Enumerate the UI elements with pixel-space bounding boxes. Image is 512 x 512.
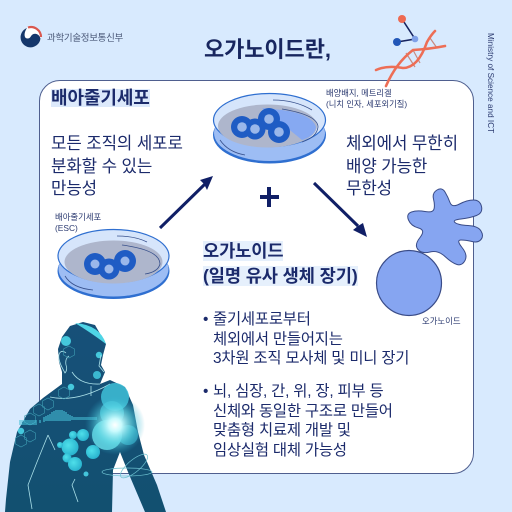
heading: organoid	[203, 241, 358, 286]
heading: embryonic stem cell: 배아줄기세포	[51, 88, 150, 108]
text block: description one: •	[203, 311, 208, 328]
icon: round organoid	[376, 250, 442, 316]
text block: self renewal	[346, 134, 458, 198]
icon: left petri dish	[58, 230, 170, 299]
text block: description one: 3차원 조직 모사체 및 미니 장기	[213, 350, 409, 367]
icon: branched organoid	[408, 189, 482, 265]
icon: plus sign	[260, 187, 279, 207]
label: culture medium	[326, 88, 407, 109]
text block: description two: 맞춤형 치료제 개발 및	[213, 422, 351, 439]
label: culture medium: (니치 인자, 세포외기질)	[326, 99, 407, 109]
white rounded content panel	[39, 80, 474, 474]
text block: description two: 임상실험 대체 가능성	[213, 442, 347, 458]
label: culture medium: 배양배지, 메트리겔	[326, 88, 392, 98]
label: ESC	[55, 212, 101, 232]
title: 오가노이드란,	[204, 37, 331, 62]
label: ESC: 배아줄기세포	[55, 212, 101, 222]
text block: self renewal: 체외에서 무한히	[346, 134, 458, 153]
icon: DNA and molecule	[376, 15, 445, 86]
text block: pluripotency: 분화할 수 있는	[51, 156, 152, 176]
heading: organoid: 오가노이드	[203, 241, 283, 261]
icon: top petri dish	[213, 94, 326, 164]
text block: description two: 뇌, 심장, 간, 위, 장, 피부 등	[213, 383, 383, 400]
logo text: 과학기술정보통신부	[47, 33, 123, 44]
text block: description two: •	[203, 383, 208, 400]
text block: description two	[203, 383, 393, 458]
text block: description one: 줄기세포로부터	[213, 311, 311, 328]
text block: pluripotency	[51, 134, 183, 198]
text block: description two: 신체와 동일한 구조로 만들어	[213, 402, 393, 420]
label: ESC: (ESC)	[55, 222, 78, 232]
text block: description one	[203, 311, 409, 367]
heading: organoid: (일명 유사 생체 장기)	[203, 266, 358, 286]
text block: pluripotency: 만능성	[51, 179, 97, 198]
ministry vertical text: Ministry of Science and ICT	[486, 33, 495, 133]
arrow: down right	[314, 183, 367, 237]
arrow: up right	[160, 176, 213, 228]
icon: government logo	[21, 27, 41, 47]
text block: self renewal: 배양 가능한	[346, 156, 427, 176]
text block: pluripotency: 모든 조직의 세포로	[51, 134, 183, 153]
label: organoid: 오가노이드	[422, 316, 461, 326]
text block: self renewal: 무한성	[346, 179, 392, 198]
text block: description one: 체외에서 만들어지는	[213, 330, 343, 348]
illustration: human figure	[5, 322, 166, 512]
